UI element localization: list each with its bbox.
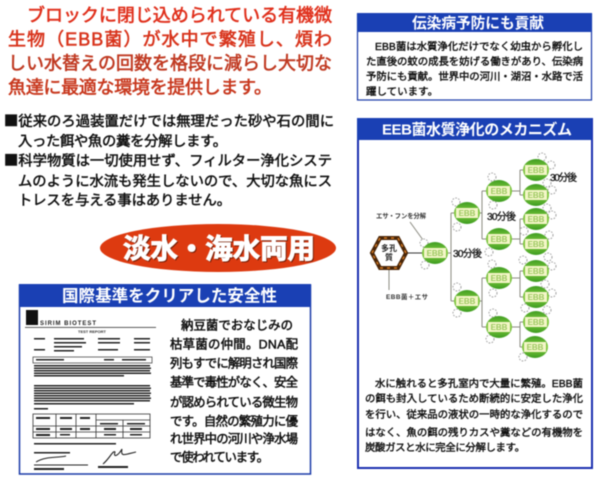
diagram labels: エサ・フンを分解 [376, 211, 427, 220]
connector lines [389, 170, 524, 347]
safety description text: です。自然の繁殖力に優 [170, 414, 299, 428]
icon: porous block hexagon: 多孔 [381, 243, 397, 253]
EBB bacteria nodes: EBB [427, 249, 444, 258]
mechanism description text [365, 377, 584, 454]
intro text: red lead paragraph [8, 4, 332, 98]
panel heading: 国際基準をクリアした安全性 [62, 286, 277, 306]
icon: porous block hexagon: 質 [385, 252, 393, 262]
arrow: porous block to bacteria [407, 252, 422, 254]
EBB bacteria nodes: EBB [528, 293, 545, 302]
safety description text [170, 318, 299, 464]
EBB bacteria nodes: EBB [491, 274, 508, 283]
bullet list: feature text [4, 110, 334, 209]
panel heading [19, 284, 311, 307]
safety description text: が認められている微生物 [170, 394, 298, 410]
EBB bacteria nodes: EBB [491, 323, 508, 332]
test report document [25, 310, 156, 470]
disease prevention text: 予防にも貢献。世界中の河川・湖沼・水路で活 [366, 70, 583, 83]
EBB bacteria nodes: EBB [527, 343, 544, 352]
disease prevention text: 躍しています。 [366, 86, 438, 98]
intro text: red lead paragraph: 生物（EBB菌）が水中で繁殖し、煩わ [8, 28, 332, 50]
icon: porous block hexagon [372, 238, 406, 268]
safety description text: 枯草菌の仲間。DNA配 [170, 336, 298, 352]
mechanism description text: を行い、従来品の液状の一時的な浄化するので [365, 408, 583, 421]
intro text: red lead paragraph: ブロックに閉じ込められている有機微 [27, 4, 332, 26]
mechanism description text: 炭酸ガスと水に完全に分解します。 [365, 441, 525, 454]
intro text: red lead paragraph: 魚達に最適な環境を提供します。 [8, 78, 272, 98]
test report document: SIRIM BIOTEST [40, 321, 96, 327]
disease prevention text: た直後の蚊の成長を妨げる働きがあり、伝染病 [366, 55, 583, 68]
safety description text: 納豆菌でおなじみの [181, 318, 293, 332]
mechanism description text: の餌も封入しているため断続的に安定した浄化 [365, 392, 584, 405]
EBB bacteria nodes: EBB [528, 215, 545, 224]
EBB bacteria nodes [422, 159, 549, 358]
bullet list: feature text: ムのように水流も発生しないので、大切な魚にス [18, 173, 332, 190]
panel heading: EEB菌水質浄化のメカニズム [382, 120, 572, 138]
diagram labels: 30分後 [550, 171, 577, 184]
diagram: bacteria multiplication tree [372, 153, 577, 361]
panel heading: 伝染病予防にも貢献 [412, 14, 544, 32]
safety description text: 列もすでに解明され国際 [170, 356, 299, 370]
panel: EBB purification mechanism [357, 118, 592, 468]
bullet list: feature text: ■従来のろ過装置だけでは無理だった砂や石の間に [4, 110, 334, 131]
diagram labels: 30分後 [487, 210, 516, 223]
mechanism description text: はなく、魚の餌の残りカスや糞などの有機物を [365, 426, 583, 439]
EBB bacteria nodes: EBB [528, 166, 545, 175]
safety description text: で使われています。 [170, 450, 269, 464]
safety description text: 基準で毒性がなく、安全 [170, 374, 298, 390]
EBB bacteria nodes: EBB [528, 240, 545, 249]
badge: freshwater and saltwater: 淡水・海水両用 [123, 233, 315, 264]
EBB bacteria nodes: EBB [459, 209, 476, 218]
panel: disease prevention [357, 13, 592, 100]
panel: international safety standards [19, 284, 311, 474]
test report document: TEST REPORT [78, 329, 107, 334]
EBB bacteria nodes: EBB [491, 235, 508, 244]
badge: freshwater and saltwater [100, 224, 336, 272]
bullet list: feature text: トレスを与える事はありません。 [18, 192, 231, 209]
mechanism description text: 水に触れると多孔室内で大量に繁殖。EBB菌 [375, 377, 583, 390]
EBB bacteria nodes: EBB [528, 191, 545, 200]
panel heading [357, 13, 592, 32]
diagram labels: 30分後 [453, 247, 482, 260]
panel heading [357, 118, 592, 140]
small bubbles [420, 153, 556, 361]
safety description text: れ世界中の河川や浄水場 [170, 431, 298, 446]
EBB bacteria nodes: EBB [491, 187, 508, 196]
EBB bacteria nodes: EBB [528, 318, 545, 327]
diagram labels [376, 171, 577, 301]
EBB bacteria nodes: EBB [459, 297, 476, 306]
bullet list: feature text: ■科学物質は一切使用せず、フィルター浄化システ [4, 150, 332, 170]
disease prevention text [366, 40, 583, 98]
intro text: red lead paragraph: しい水替えの回数を格段に減らし大切な [8, 54, 332, 74]
diagram labels: EBB菌＋エサ [386, 292, 428, 301]
disease prevention text: EBB菌は水質浄化だけでなく幼虫から孵化し [375, 40, 583, 53]
EBB bacteria nodes: EBB [528, 267, 545, 276]
bullet list: feature text: 入った餌や魚の糞を分解します。 [18, 133, 227, 150]
